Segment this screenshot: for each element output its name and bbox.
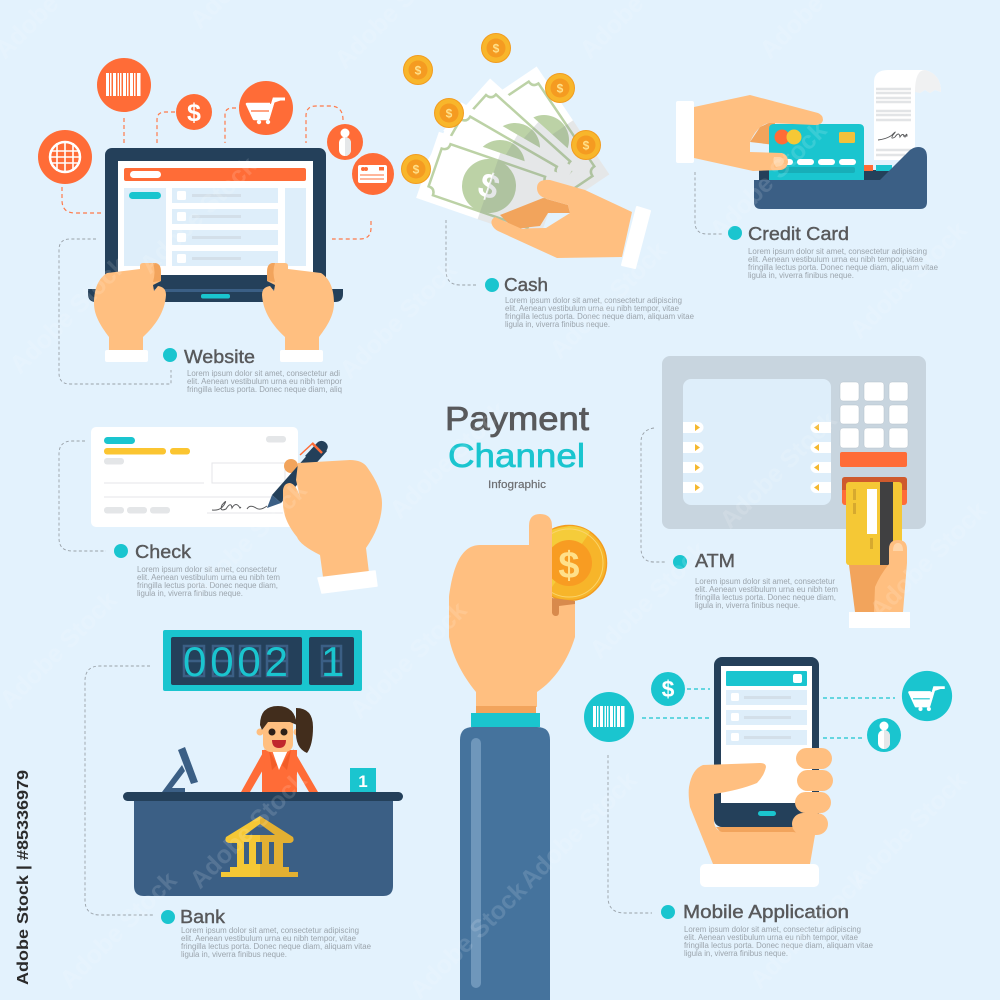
coins: $ xyxy=(557,82,564,96)
title: Channel xyxy=(448,437,585,474)
label: website: Website xyxy=(184,347,255,367)
watermark: Adobe Stock xyxy=(134,151,262,279)
label: check: Lorem ipsum dolor sit amet, consectetur xyxy=(137,565,277,574)
watermark: Adobe Stock xyxy=(584,536,712,664)
label: check: Check xyxy=(135,542,192,562)
computer monitor xyxy=(162,747,198,792)
watermark: Adobe Stock xyxy=(334,256,462,384)
hand with pen xyxy=(267,441,382,593)
label: bank: Bank xyxy=(180,907,226,927)
receipt xyxy=(874,70,941,160)
label: mobile application: ligula in, viverra finibus neque. xyxy=(684,949,788,958)
label: mobile application: fringilla lectus porta. Donec neque diam, aliquam vitae xyxy=(684,941,873,950)
label: cash xyxy=(485,275,694,329)
icon: credit card xyxy=(352,153,394,195)
panel: check xyxy=(59,427,382,598)
banknotes: $ xyxy=(473,165,504,208)
watermark: Adobe Stock xyxy=(514,766,642,894)
label: website: Lorem ipsum dolor sit amet, consectetur adi xyxy=(187,369,340,378)
label: check xyxy=(114,542,280,598)
watermark: Adobe Stock xyxy=(344,596,472,724)
label: ATM xyxy=(673,551,838,610)
coin: $ xyxy=(558,545,580,587)
label: website xyxy=(163,347,342,394)
watermark: Adobe Stock xyxy=(714,406,842,534)
watermark: Adobe Stock xyxy=(844,766,972,894)
laptop xyxy=(88,148,343,302)
icon: dollar teal xyxy=(651,672,685,706)
title xyxy=(445,400,589,491)
label: ATM: ligula in, viverra finibus neque. xyxy=(695,601,800,610)
hand inserting card xyxy=(846,482,910,628)
hand: left on laptop xyxy=(94,263,166,362)
label: cash: ligula in, viverra finibus neque. xyxy=(505,320,610,329)
counter number sign: 1 xyxy=(358,772,368,791)
label: bank: elit. Aenean vestibulum urna eu nibh tempor, vitae xyxy=(181,934,356,943)
icon: cart xyxy=(239,81,293,135)
icon: dollar teal: $ xyxy=(662,676,675,702)
label: mobile application xyxy=(661,902,873,958)
banknotes xyxy=(416,67,609,240)
coins: $ xyxy=(415,64,422,78)
label: bank: fringilla lectus porta. Donec neque diam, aliquam vitae xyxy=(181,942,371,951)
watermark: Adobe Stock xyxy=(384,396,512,524)
watermark: Adobe Stock xyxy=(544,236,672,364)
watermark: Adobe Stock xyxy=(864,496,992,624)
queue number display xyxy=(163,630,362,691)
label: bank: Lorem ipsum dolor sit amet, consectetur adipiscing xyxy=(181,926,359,935)
coins: $ xyxy=(583,138,590,152)
watermark: Adobe Stock xyxy=(184,766,312,894)
label: credit card: Credit Card xyxy=(748,224,849,244)
label: check: ligula in, viverra finibus neque. xyxy=(137,589,243,598)
watermark: Adobe Stock xyxy=(844,216,972,344)
title: Payment xyxy=(445,400,589,437)
label: ATM: Lorem ipsum dolor sit amet, consectetur xyxy=(695,577,835,586)
label: check: elit. Aenean vestibulum urna eu nibh tem xyxy=(137,573,280,582)
watermark: Adobe Stock xyxy=(4,251,132,379)
icon: barcode teal xyxy=(584,692,634,742)
counter number sign xyxy=(350,768,376,792)
card reader xyxy=(754,147,927,209)
panel: bank xyxy=(85,630,403,959)
icon: dollar xyxy=(176,94,212,130)
label: bank: ligula in, viverra finibus neque. xyxy=(181,950,287,959)
hand gripping card, back xyxy=(750,120,775,145)
label: cash: Cash xyxy=(504,275,548,295)
watermark: Adobe Stock xyxy=(704,116,832,244)
icon: person teal xyxy=(867,718,901,752)
label: check: fringilla lectus porta. Donec neque diam, xyxy=(137,581,278,590)
label: credit card: ligula in, viverra finibus neque. xyxy=(748,271,854,280)
hand holding phone xyxy=(689,748,833,887)
label: mobile application: elit. Aenean vestibulum urna eu nibh tempor, vitae xyxy=(684,933,858,942)
counter desk xyxy=(123,792,403,896)
panel: ATM xyxy=(641,356,926,628)
ATM machine xyxy=(662,356,926,529)
icon: globe xyxy=(38,130,92,184)
icon: bank building xyxy=(221,816,298,877)
label: ATM: elit. Aenean vestibulum urna eu nibh tem xyxy=(695,585,838,594)
label: ATM: ATM xyxy=(695,551,735,571)
label: credit card: elit. Aenean vestibulum urna eu nibh tempor, vitae xyxy=(748,255,923,264)
label: cash: Lorem ipsum dolor sit amet, consectetur adipiscing xyxy=(505,296,682,305)
check paper xyxy=(91,427,298,527)
label: credit card xyxy=(728,224,938,280)
coins xyxy=(402,34,600,184)
smartphone xyxy=(714,657,819,827)
label: cash: elit. Aenean vestibulum urna eu nibh tempor, vitae xyxy=(505,304,679,313)
hand xyxy=(449,514,575,713)
icon: person xyxy=(327,124,363,160)
label: credit card: Lorem ipsum dolor sit amet, consectetur adipiscing xyxy=(748,247,927,256)
label: mobile application: Mobile Application xyxy=(683,902,849,922)
title: Infographic xyxy=(488,479,547,491)
panel: mobile application xyxy=(584,657,952,958)
hand holding banknotes xyxy=(491,180,650,268)
label: cash: fringilla lectus porta. Donec neque diam, aliquam vitae xyxy=(505,312,694,321)
coins: $ xyxy=(493,42,500,56)
coin xyxy=(532,526,606,600)
label: ATM: fringilla lectus porta. Donec neque diam, xyxy=(695,593,836,602)
hand: right on laptop xyxy=(262,263,334,362)
label: mobile application: Lorem ipsum dolor sit amet, consectetur adipiscing xyxy=(684,925,861,934)
watermark: Adobe Stock xyxy=(184,476,312,604)
label: website: fringilla lectus porta. Donec neque diam, aliq xyxy=(187,385,342,394)
bank teller xyxy=(241,706,318,792)
watermark: Adobe Stock xyxy=(54,866,182,994)
coins: $ xyxy=(413,162,420,176)
hand holding credit card xyxy=(676,95,823,171)
panel: credit card xyxy=(676,70,941,280)
watermark: Adobe Stock xyxy=(744,866,872,994)
stock image id: Adobe Stock | #85336979 xyxy=(15,770,32,985)
panel: website xyxy=(38,58,394,394)
label: bank xyxy=(161,907,371,959)
icon: dollar: $ xyxy=(187,99,201,127)
sleeve xyxy=(460,713,550,1000)
queue number display: 1 xyxy=(321,638,344,685)
panel: cash xyxy=(402,34,694,329)
label: credit card: fringilla lectus porta. Donec neque diam, aliquam vitae xyxy=(748,263,938,272)
connector lines: website icons xyxy=(62,106,371,239)
icon: cart teal xyxy=(902,671,952,721)
center hand holding coin xyxy=(449,514,606,1000)
credit card xyxy=(769,124,864,180)
queue number display: 0002 xyxy=(183,638,288,685)
icon: barcode xyxy=(97,58,151,112)
coins: $ xyxy=(446,106,453,120)
connector lines: mobile icons xyxy=(642,689,895,738)
label: website: elit. Aenean vestibulum urna eu nibh tempor xyxy=(187,377,342,386)
